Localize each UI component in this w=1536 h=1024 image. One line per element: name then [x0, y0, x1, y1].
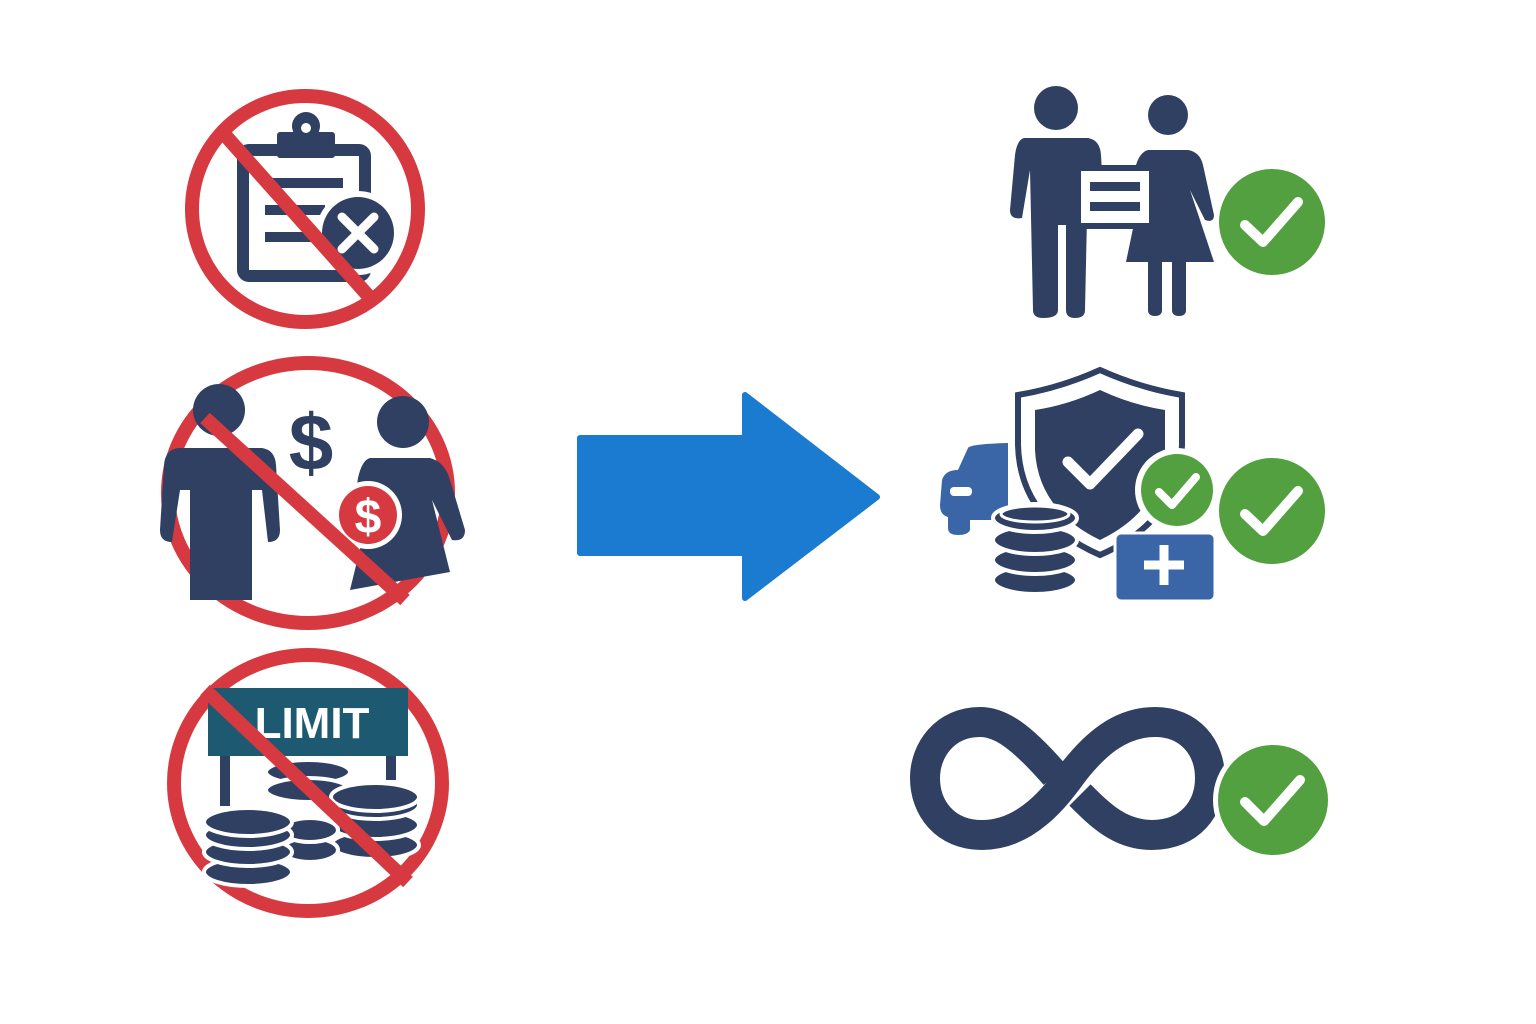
icon: infinity with check — [925, 722, 1333, 860]
icon: no limit (limit sign with coins crossed out): LIMIT — [255, 699, 370, 748]
icon: shield with assets and checks — [940, 370, 1325, 601]
icon: equal partners with check — [1010, 86, 1325, 318]
icon: no contract (clipboard crossed out) — [192, 96, 418, 322]
icon: no paying partner (couple with money crossed out): $ — [289, 398, 333, 487]
arrow — [580, 395, 877, 598]
icon: no paying partner (couple with money crossed out): $ — [355, 491, 382, 544]
icon: no paying partner (couple with money crossed out) — [160, 363, 465, 623]
icon: no limit (limit sign with coins crossed out) — [174, 655, 442, 911]
